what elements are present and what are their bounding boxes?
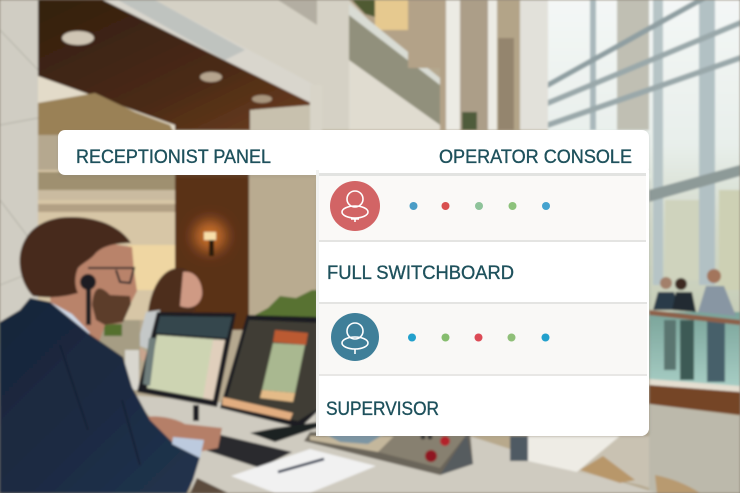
paper and pen — [231, 449, 376, 493]
background woman — [92, 268, 202, 390]
background: mid lobby, wood column, stone wall — [38, 170, 319, 330]
desk counter — [130, 395, 657, 493]
suit — [0, 298, 200, 493]
icon: blue user avatar — [331, 313, 379, 361]
glasses — [88, 268, 134, 283]
window wall right — [548, 0, 740, 320]
panel: role list — [316, 170, 649, 436]
hair — [20, 217, 131, 297]
beard — [92, 288, 131, 325]
headset — [80, 274, 96, 290]
face and neck — [50, 240, 137, 345]
panel: console overlay — [58, 130, 650, 437]
monitors — [137, 312, 319, 442]
background: ceiling soffit — [38, 0, 322, 135]
desk phone — [304, 432, 473, 475]
row: operator status — [319, 173, 646, 242]
heading: receptionist panel: RECEPTIONIST PANEL — [76, 147, 271, 168]
keyboard — [205, 434, 292, 468]
background: marble pillar left — [0, 0, 38, 340]
receptionist man — [0, 217, 222, 493]
status dots — [410, 202, 550, 210]
collar — [50, 302, 90, 338]
lobby below the panel — [470, 436, 649, 488]
row: supervisor status — [319, 302, 647, 376]
status dots — [408, 334, 550, 342]
background: upper wall and balcony — [150, 0, 549, 130]
hands — [140, 416, 222, 452]
row label: full switchboard: FULL SWITCHBOARD — [327, 263, 514, 284]
header bar — [58, 130, 649, 175]
lobby lower right with railing and people — [649, 269, 740, 493]
icon: red user avatar — [330, 181, 380, 231]
row label: supervisor: SUPERVISOR — [326, 399, 439, 420]
heading: operator console: OPERATOR CONSOLE — [439, 147, 632, 168]
